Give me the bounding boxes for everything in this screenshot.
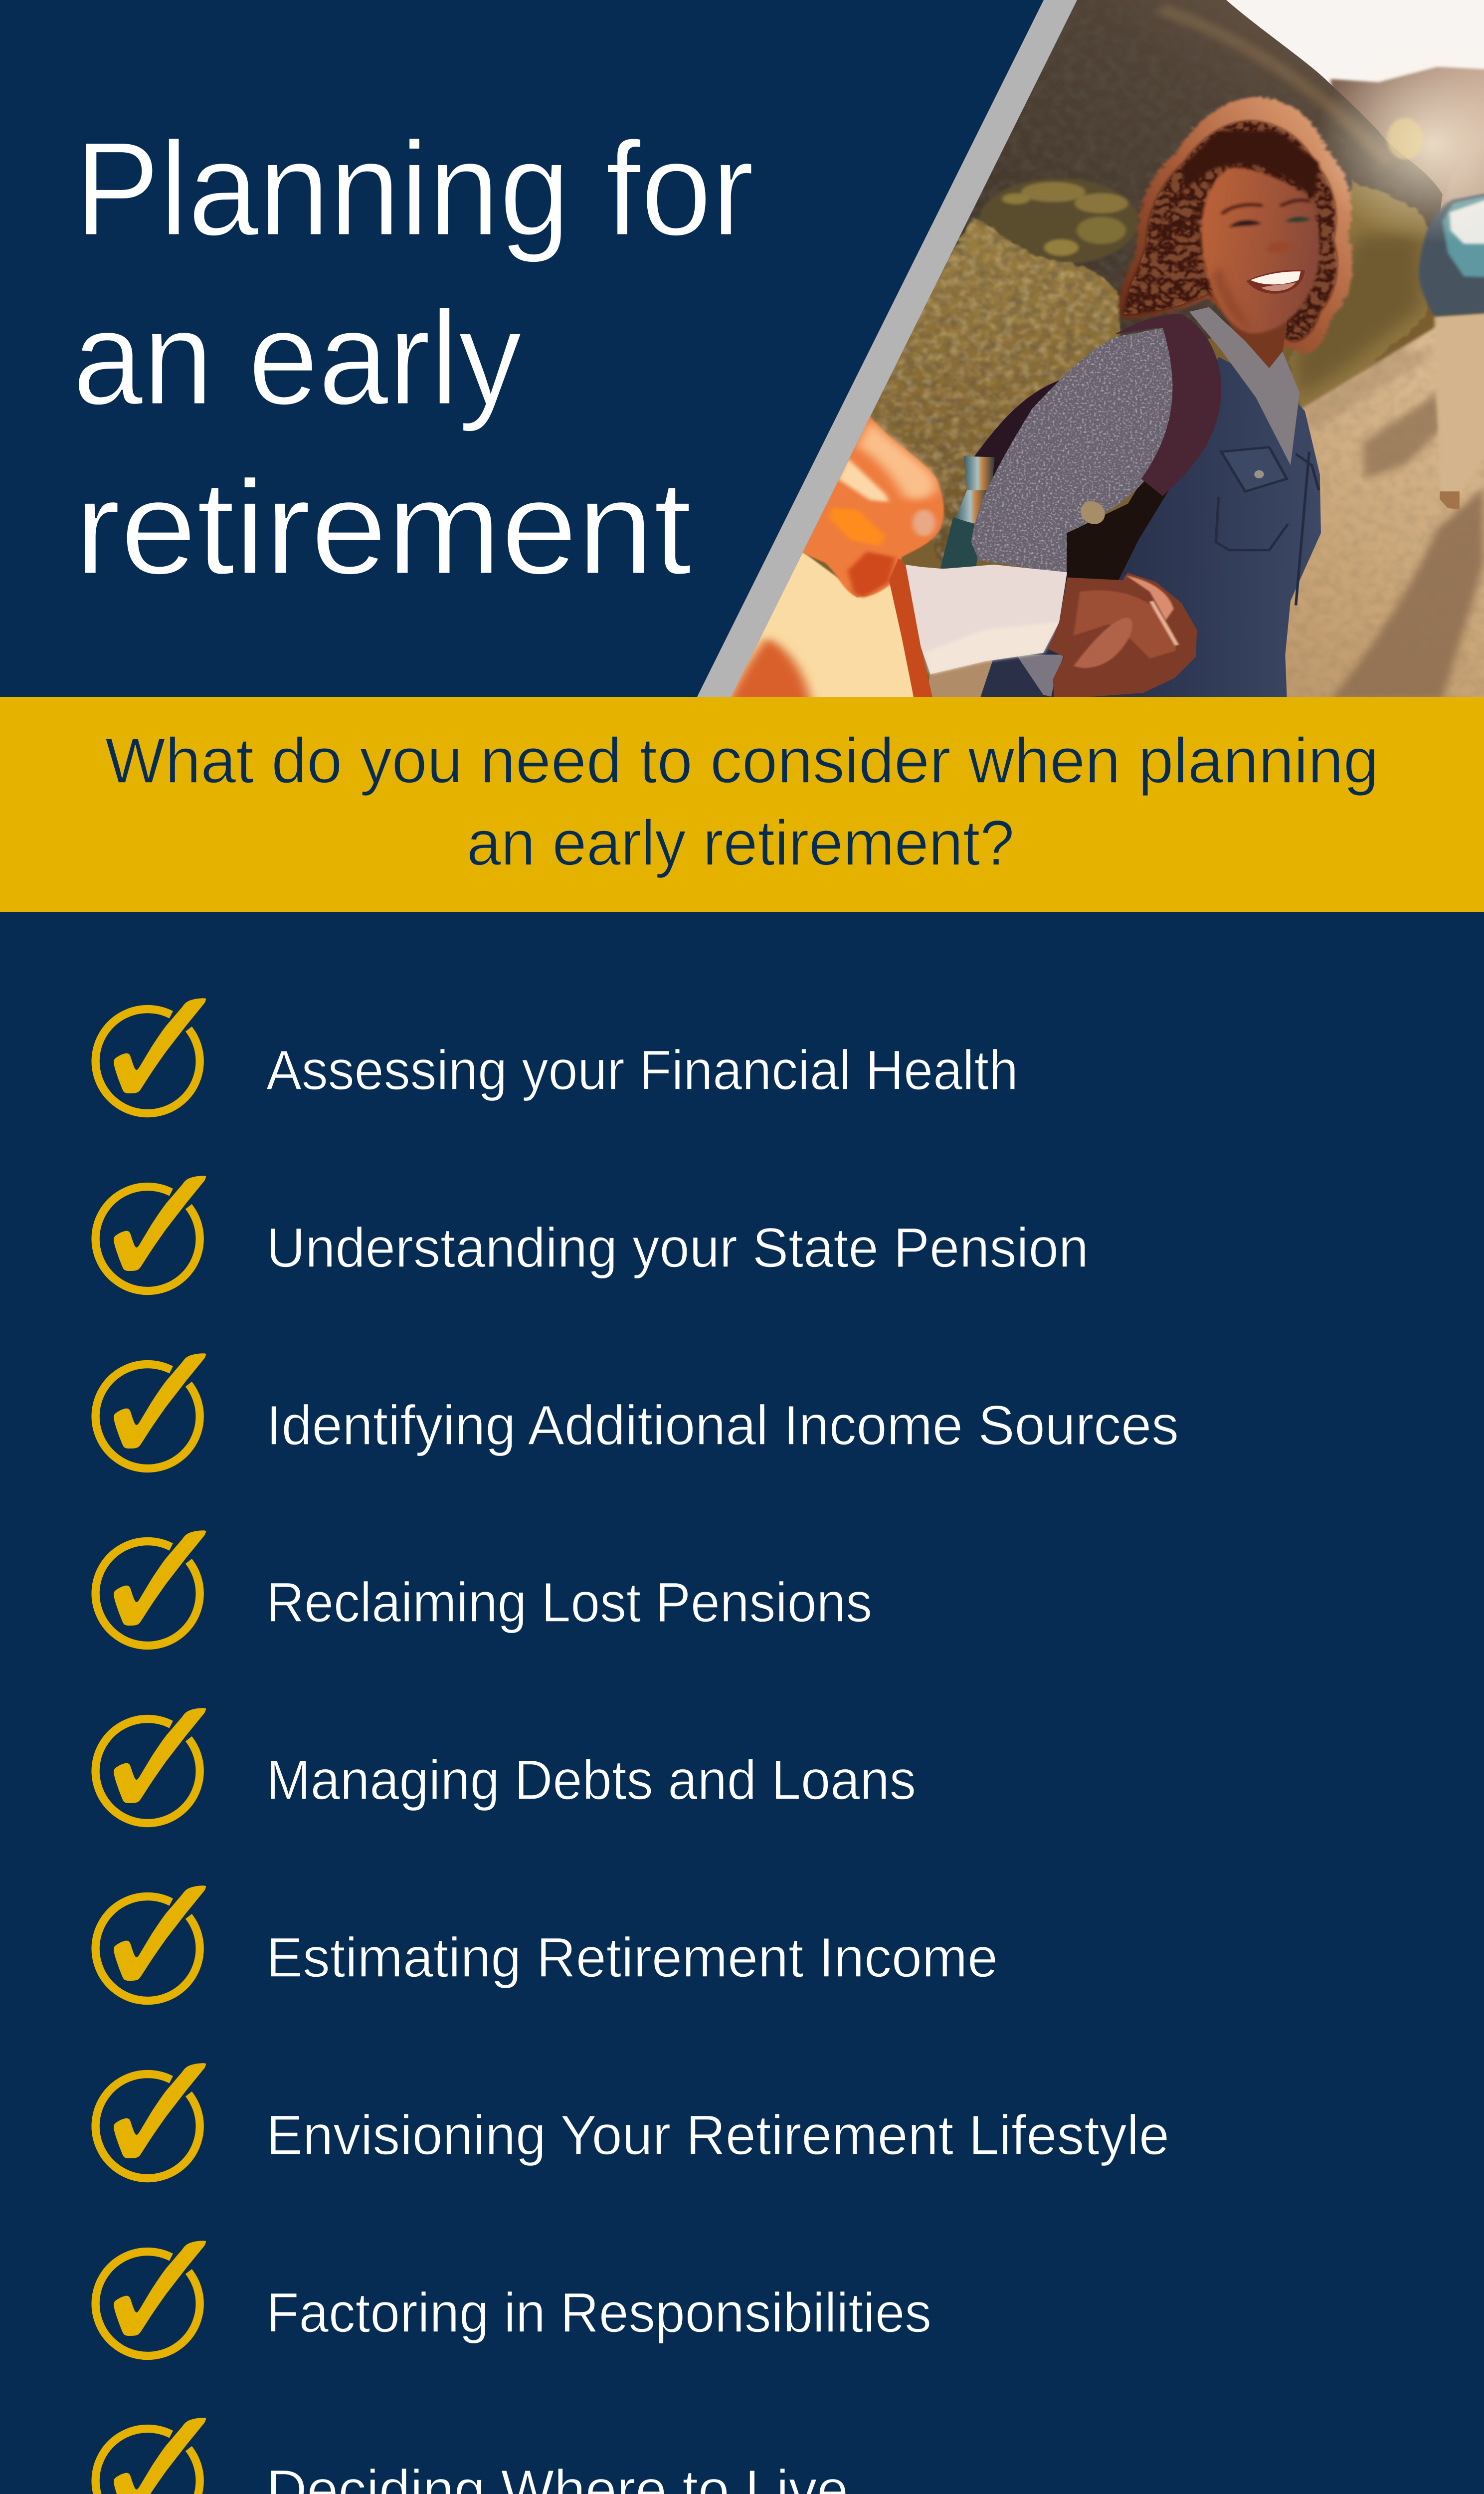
sweater sleeve	[968, 325, 1181, 578]
icon: check 4	[96, 1530, 206, 1646]
icon: check 6	[96, 1885, 206, 2001]
ground texture	[915, 316, 1484, 723]
icon: check 7	[96, 2063, 206, 2178]
hiker jacket	[1419, 190, 1484, 316]
vest pocket details	[1216, 447, 1319, 606]
white sleeve	[905, 565, 1067, 674]
hiker backpack	[1443, 192, 1484, 278]
lens flare	[1387, 118, 1423, 160]
heading: main title: retirement	[75, 452, 692, 602]
icon: check 5	[96, 1708, 206, 1823]
item 6: Estimating Retirement Income	[266, 1926, 998, 1989]
panel: gold question band	[0, 697, 1484, 912]
decorative grey diagonal	[697, 0, 1077, 697]
right hiker	[1419, 147, 1484, 510]
orange jacket shoulder	[800, 416, 944, 597]
question text: an early retirement?	[467, 808, 1014, 879]
item 3: Identifying Additional Income Sources	[266, 1394, 1179, 1456]
question text: What do you need to consider when planning	[105, 725, 1379, 797]
curl highlights	[1117, 117, 1341, 343]
far mountain	[1330, 67, 1484, 217]
lower vest	[978, 653, 1048, 704]
woman's hair rim	[1119, 97, 1353, 357]
buckle and dark strap	[1064, 429, 1181, 632]
icon: check 9	[96, 2418, 206, 2494]
lower sweater	[1016, 655, 1064, 697]
panel: navy checklist background	[0, 912, 1484, 2494]
icon: check 1	[96, 998, 206, 1113]
vest	[973, 357, 1321, 723]
jacket trim	[889, 558, 934, 704]
backpack strap	[1114, 314, 1221, 496]
woman's hair dark mass	[1117, 117, 1341, 343]
photo scene in local coordinates	[702, 0, 1484, 723]
panel: top navy header	[0, 0, 1097, 698]
hair fringe	[1181, 131, 1319, 199]
face	[1201, 168, 1319, 333]
clasped hands	[1048, 573, 1197, 699]
heading: main title: Planning for	[75, 114, 754, 264]
sun flare	[1314, 45, 1484, 244]
cream jacket body	[724, 550, 915, 704]
sky	[967, 0, 1484, 221]
hiker hair	[1445, 147, 1484, 201]
mouth	[1246, 270, 1305, 294]
distant shrubs	[979, 179, 1138, 264]
water bottle	[940, 456, 995, 568]
question text	[105, 725, 1379, 879]
nose	[1267, 241, 1291, 253]
cheek shadow	[1212, 266, 1253, 332]
sweater collar	[1189, 307, 1299, 465]
main mountain	[948, 0, 1443, 339]
sunlit ridge	[1160, 9, 1389, 163]
photo: smiling woman hiking and holding a hand on a sunlit trail	[702, 0, 1484, 723]
checklist	[96, 998, 1179, 2494]
icon: check 2	[96, 1176, 206, 1291]
vest button	[1254, 470, 1264, 478]
backpack body	[974, 361, 1107, 560]
scene base tone	[702, 194, 1484, 723]
item 7: Envisioning Your Retirement Lifestyle	[266, 2104, 1169, 2166]
item 2: Understanding your State Pension	[266, 1217, 1089, 1279]
hiker pants and boot	[1435, 312, 1484, 492]
bush texture	[862, 217, 1128, 583]
heading: main title: an early	[73, 283, 522, 433]
heading: main title	[73, 114, 754, 602]
mountain texture	[967, 7, 1327, 334]
item 8: Factoring in Responsibilities	[266, 2282, 931, 2344]
ground under sleeve	[927, 660, 994, 704]
item 5: Managing Debts and Loans	[266, 1749, 916, 1811]
trail shadows	[1304, 348, 1484, 700]
icon: check 8	[96, 2241, 206, 2356]
held hands and foreground person, detailed coordinates	[724, 416, 1197, 704]
item 1: Assessing your Financial Health	[266, 1039, 1018, 1101]
item 4: Reclaiming Lost Pensions	[266, 1571, 872, 1634]
left golden bush	[862, 217, 1128, 583]
eyebrows	[1223, 200, 1309, 213]
icon: check 3	[96, 1353, 206, 1468]
eyes	[1229, 217, 1310, 227]
right bush	[1288, 181, 1428, 420]
trail ground	[915, 316, 1484, 723]
neck	[1208, 289, 1288, 375]
